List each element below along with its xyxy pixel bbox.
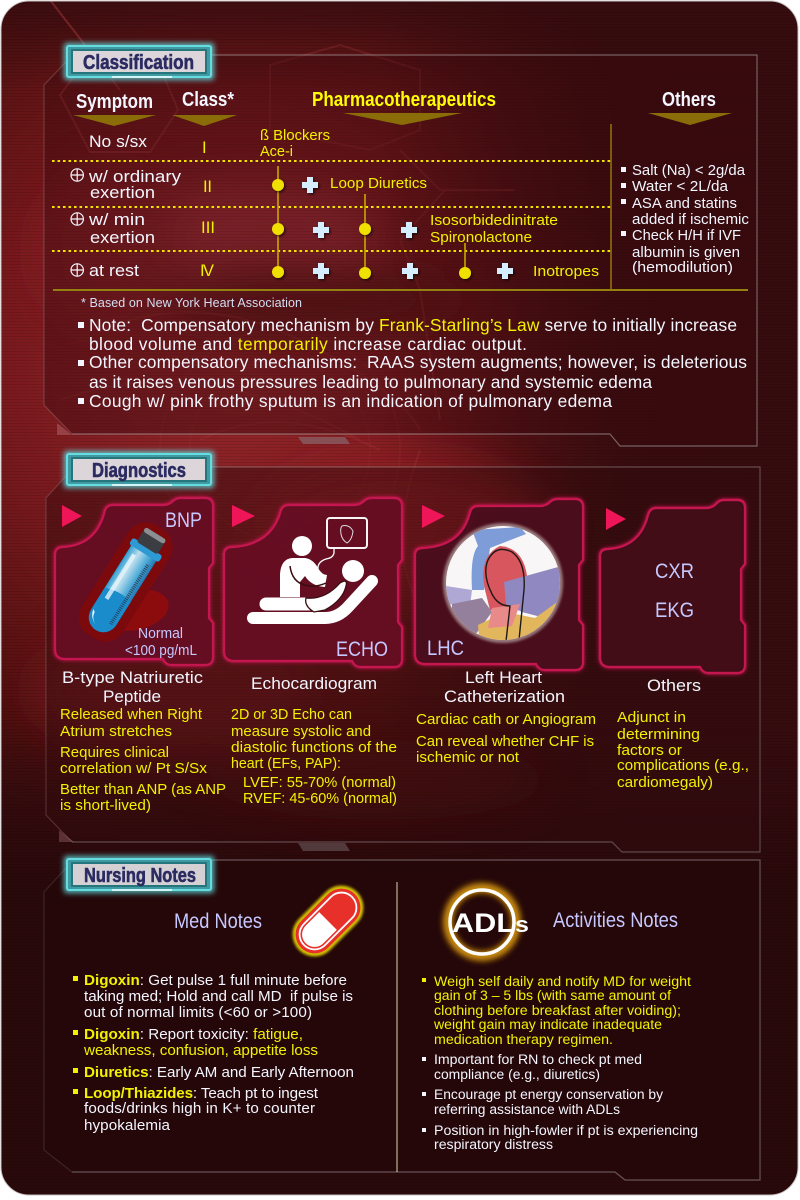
symptom column: w/ ordinary	[88, 167, 182, 186]
heading: diagnostics	[67, 454, 211, 485]
card: LHC: LHC	[427, 637, 464, 660]
pharmacotherapeutics step chart	[260, 127, 599, 280]
column: others details: determining	[617, 727, 700, 743]
column: activities notes: medication therapy regimen.	[434, 1032, 613, 1047]
pharmacotherapeutics step chart: Inotropes	[533, 263, 599, 280]
table column headers	[73, 89, 732, 126]
symptom column: w/ min	[88, 210, 145, 229]
column: echocardiogram details: LVEF: 55-70% (normal)	[243, 775, 396, 791]
column: activities notes: gain of 3 – 5 lbs (with same amount of	[434, 988, 671, 1003]
symptom column	[71, 132, 182, 280]
column: activities notes: Position in high-fowler if pt is experiencing	[434, 1123, 698, 1138]
column: med notes: Diuretics: Early AM and Early Afternoon	[84, 1064, 354, 1081]
column: BNP details: correlation w/ Pt S/Sx	[60, 761, 208, 777]
card: others	[600, 500, 745, 673]
column: others details: Adjunct in	[617, 710, 686, 726]
class column	[200, 138, 215, 280]
column: left heart catheterization details: Left Heart	[465, 668, 542, 687]
column: others details: complications (e.g.,	[617, 758, 749, 774]
notes list: as it raises venous pressures leading to pulmonary and systemic edema	[89, 372, 652, 392]
column: activities notes: Activities Notes	[553, 909, 678, 932]
heading: nursing notes: Nursing Notes	[84, 865, 196, 887]
others list: Salt (Na) < 2g/da	[632, 163, 746, 179]
column: activities notes: compliance (e.g., diuretics)	[434, 1067, 600, 1082]
column: left heart catheterization details: Can reveal whether CHF is	[416, 734, 594, 750]
notes list: Other compensatory mechanisms: RAAS system augments; however, is deleterious	[89, 352, 747, 372]
notes list: Note: Compensatory mechanism by Frank-Starling’s Law serve to initially increase	[89, 315, 737, 335]
column: BNP details: Better than ANP (as ANP	[60, 782, 226, 798]
column: activities notes: referring assistance with ADLs	[434, 1102, 620, 1117]
table row rules	[52, 161, 611, 251]
symptom column: No s/sx	[89, 132, 148, 151]
column: others details: factors or	[617, 743, 682, 759]
class column: I	[202, 138, 207, 157]
table column headers: Others	[662, 89, 716, 111]
heading: diagnostics: Diagnostics	[92, 460, 186, 482]
panel: diagnostics	[46, 454, 760, 852]
class column: III	[201, 218, 215, 237]
column: BNP details	[60, 668, 226, 814]
card: LHC	[415, 499, 583, 670]
column: med notes: foods/drinks high in K+ to counter	[84, 1100, 315, 1117]
column: med notes	[73, 876, 373, 1134]
pharmacotherapeutics step chart: ß Blockers	[260, 127, 330, 144]
column: echocardiogram details: measure systolic and	[231, 724, 371, 740]
others list: (hemodilution)	[632, 260, 733, 276]
notes list	[78, 315, 747, 411]
column: BNP details: is short-lived)	[60, 798, 151, 814]
table column headers: Class*	[182, 89, 234, 111]
card: BNP: Normal	[138, 625, 183, 642]
panel: nursing notes	[44, 859, 760, 1180]
column: echocardiogram details: Echocardiogram	[251, 674, 377, 693]
column: activities notes: Encourage pt energy conservation by	[434, 1087, 663, 1102]
column: BNP details: Atrium stretches	[60, 724, 172, 740]
column: activities notes: clothing before breakfast after voiding);	[434, 1003, 681, 1018]
table column headers: Pharmacotherapeutics	[312, 89, 496, 111]
column: activities notes: Important for RN to check pt med	[434, 1052, 642, 1067]
column: med notes: Digoxin: Get pulse 1 full minute before	[84, 972, 347, 989]
card: BNP	[55, 498, 213, 665]
column: med notes: Loop/Thiazides: Teach pt to ingest	[84, 1085, 319, 1102]
column: med notes: weakness, confusion, appetite loss	[83, 1042, 318, 1059]
pharmacotherapeutics step chart: Loop Diuretics	[330, 175, 427, 192]
notes list: blood volume and temporarily increase cardiac output.	[89, 334, 527, 354]
card: ECHO: ECHO	[336, 638, 388, 661]
icon: test tube	[71, 515, 180, 650]
others list: albumin is given	[632, 245, 740, 261]
others list: ASA and statins	[632, 196, 737, 212]
symptom column: exertion	[90, 228, 155, 247]
symptom column: at rest	[89, 261, 139, 280]
class column: II	[203, 177, 212, 196]
others list: Water < 2L/da	[632, 179, 729, 195]
heading: nursing notes	[67, 859, 211, 890]
card: BNP: <100 pg/mL	[125, 642, 197, 659]
pharmacotherapeutics step chart: Ace-i	[260, 143, 293, 160]
column: med notes: out of normal limits (<60 or >100)	[84, 1004, 312, 1021]
column: BNP details: Peptide	[103, 687, 161, 706]
column: left heart catheterization details: Catheterization	[444, 687, 565, 706]
column: others details	[617, 676, 749, 791]
column: echocardiogram details	[231, 674, 397, 807]
pharmacotherapeutics step chart: Spironolactone	[430, 229, 532, 246]
icon: echo exam pictogram	[253, 518, 372, 618]
others list	[621, 163, 750, 276]
card: BNP: BNP	[165, 509, 202, 532]
table column headers: Symptom	[76, 91, 153, 113]
notes list: Cough w/ pink frothy sputum is an indication of pulmonary edema	[89, 391, 612, 411]
others list: added if ischemic	[632, 212, 750, 228]
column: activities notes	[422, 888, 698, 1152]
column: med notes: taking med; Hold and call MD if pulse is	[84, 988, 353, 1005]
med notes heading: Med Notes	[174, 910, 262, 933]
column: echocardiogram details: heart (EFs, PAP):	[231, 756, 341, 772]
column: BNP details: Requires clinical	[60, 745, 169, 761]
column: left heart catheterization details	[416, 668, 596, 766]
column: med notes: hypokalemia	[84, 1117, 171, 1134]
column: activities notes: respiratory distress	[434, 1137, 553, 1152]
panel: classification	[44, 46, 757, 446]
others list: Check H/H if IVF	[632, 228, 741, 244]
column: BNP details: Released when Right	[60, 707, 202, 723]
icon: ADLs badge: ADL s	[452, 908, 529, 938]
column: activities notes: Weigh self daily and notify MD for weight	[434, 974, 691, 989]
column: med notes: Digoxin: Report toxicity: fatigue,	[84, 1026, 303, 1043]
column: echocardiogram details: diastolic functions of the	[231, 740, 397, 756]
icon: ADLs badge	[448, 888, 529, 956]
footnote: * Based on New York Heart Association	[81, 296, 302, 310]
column: BNP details: B-type Natriuretic	[62, 668, 203, 687]
card: others: EKG	[655, 599, 694, 622]
column: echocardiogram details: RVEF: 45-60% (normal)	[243, 791, 397, 807]
column: others details: cardiomegaly)	[617, 775, 713, 791]
column: left heart catheterization details: Cardiac cath or Angiogram	[416, 712, 596, 728]
symptom column: exertion	[90, 183, 155, 202]
pharmacotherapeutics step chart: Isosorbidedinitrate	[430, 212, 558, 229]
column: left heart catheterization details: ischemic or not	[416, 750, 519, 766]
column: activities notes: weight gain may indicate inadequate	[433, 1017, 662, 1032]
heading: classification: Classification	[83, 52, 194, 74]
column: echocardiogram details: 2D or 3D Echo can	[231, 707, 352, 723]
icon: heart catheterization illustration	[446, 526, 560, 640]
icon: pill capsule	[283, 876, 373, 966]
class column: IV	[200, 261, 214, 280]
column: others details: Others	[647, 676, 701, 695]
heading: classification	[67, 46, 211, 77]
card: others: CXR	[655, 560, 694, 583]
card: ECHO	[224, 498, 402, 667]
